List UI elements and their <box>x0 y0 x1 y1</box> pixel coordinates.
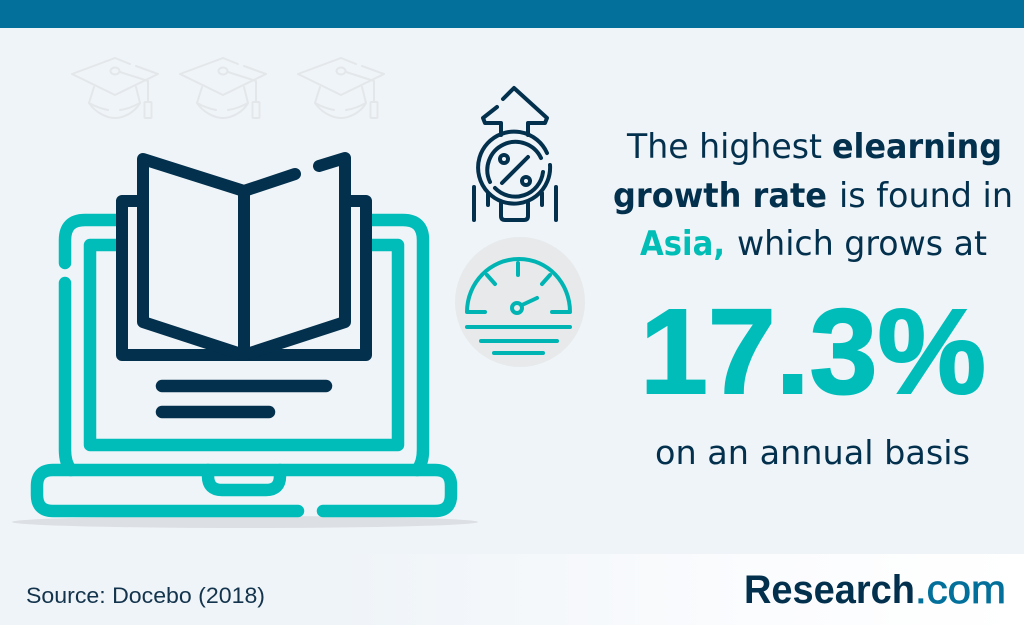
heading text: growth rate <box>613 176 827 216</box>
logo: Research.com: .com <box>915 568 1006 612</box>
heading text: The highest <box>626 127 822 167</box>
speedometer lines <box>467 259 570 353</box>
icon: speedometer <box>455 237 585 367</box>
big number: 17.3% <box>640 283 986 419</box>
source note: Source: Docebo (2018) <box>26 583 265 608</box>
footer band <box>0 554 1024 625</box>
heading text: elearning <box>832 127 1002 167</box>
icon: laptop with open book <box>37 158 451 511</box>
top bar <box>0 0 1024 28</box>
icons: graduation caps <box>72 58 384 118</box>
heading text: Asia, <box>640 224 725 264</box>
heading text: is found in <box>839 176 1013 216</box>
laptop shadow <box>12 516 478 528</box>
heading text <box>613 127 1013 264</box>
heading text: which grows at <box>737 224 987 264</box>
subtext: on an annual basis <box>655 433 970 472</box>
speedometer badge <box>455 237 585 367</box>
laptop body <box>37 220 451 511</box>
logo: Research.com <box>744 568 1006 612</box>
text lines on screen <box>162 386 326 412</box>
logo: Research.com: Research <box>744 568 915 612</box>
icon: percent growth arrow <box>474 88 556 220</box>
open book <box>122 158 366 355</box>
